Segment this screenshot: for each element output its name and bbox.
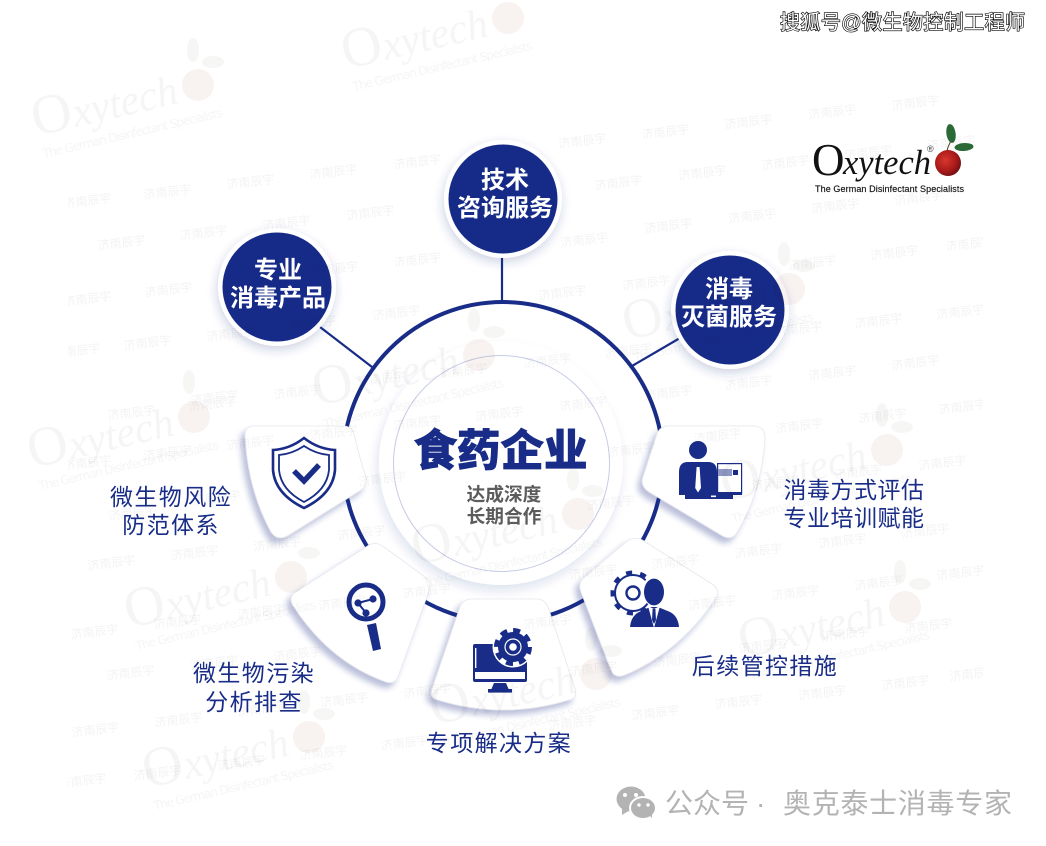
node: 消毒灭菌服务 circle: [671, 251, 789, 369]
watermark pattern: 济南辰宇: [761, 152, 810, 173]
node text: 技术咨询服务: [457, 167, 553, 222]
watermark pattern: 济南辰宇: [891, 92, 940, 113]
watermark pattern: 济南辰宇: [774, 318, 823, 339]
watermark pattern: 济南辰宇: [262, 212, 311, 233]
watermark pattern: 济南辰宇: [808, 362, 857, 383]
watermark logos: The German Disinfectant Specialists: [133, 598, 317, 653]
watermark logos: xytech: [756, 433, 871, 502]
node text: 专业消毒产品: [230, 257, 326, 312]
watermark pattern: 济南辰宇: [714, 691, 763, 712]
center subtitle: [467, 484, 542, 527]
watermark logos: O: [25, 79, 78, 149]
watermark pattern: 济南辰宇: [854, 310, 903, 331]
brand logo: Oxytech: The German Disinfectant Specialists: [815, 184, 964, 194]
icon: person at computer: [679, 441, 742, 499]
watermark logos: xytech: [63, 400, 178, 469]
watermark logos: xytech: [774, 590, 889, 659]
node text: 技术咨询服务: 技术: [481, 167, 529, 194]
footer account name: ·: [756, 788, 765, 819]
watermark pattern: 济南辰宇: [854, 572, 903, 593]
watermark pattern: 济南辰宇: [299, 742, 348, 763]
watermark pattern: 济南辰宇: [693, 425, 742, 446]
watermark pattern: 济南辰宇: [52, 340, 101, 361]
watermark pattern: 济南辰宇: [192, 487, 241, 508]
watermark logos: The German Disinfectant Specialists: [350, 39, 534, 94]
watermark pattern: 济南辰宇: [143, 442, 192, 463]
icon: monitor with gear: [473, 626, 534, 693]
watermark logos: The German Disinfectant Specialists: [321, 376, 505, 431]
watermark pattern: 济南辰宇: [569, 561, 618, 582]
watermark pattern: 济南辰宇: [372, 302, 421, 323]
watermark pattern: 济南辰宇: [558, 130, 607, 151]
node text: 专业消毒产品: 专业: [254, 257, 302, 284]
connector lines: [320, 255, 680, 367]
watermark pattern: 济南辰宇: [560, 229, 609, 250]
watermark pattern: 济南辰宇: [894, 187, 943, 208]
watermark pattern: 济南辰宇: [724, 372, 773, 393]
watermark pattern: 济南辰宇: [358, 468, 407, 489]
watermark pattern: 济南辰宇: [821, 623, 870, 644]
label: 微生物污染分析排查: [193, 660, 315, 715]
watermark pattern: 济南辰宇: [569, 658, 618, 679]
watermark pattern: 济南辰宇: [63, 288, 112, 309]
watermark pattern: 济南辰宇: [154, 709, 203, 730]
watermark logos: xytech: [348, 338, 463, 407]
watermark pattern: 济南辰宇: [936, 301, 985, 322]
watermark logos: O: [118, 571, 171, 641]
watermark pattern: 济南辰宇: [190, 387, 239, 408]
watermark pattern: 济南辰宇: [548, 712, 597, 733]
watermark pattern: 济南辰宇: [309, 161, 358, 182]
watermark pattern: 济南辰宇: [858, 405, 907, 426]
watermark pattern: 济南辰宇: [834, 461, 883, 482]
watermark pattern: 济南辰宇: [881, 672, 930, 693]
watermark pattern: 济南辰宇: [253, 533, 302, 554]
watermark pattern: 济南辰宇: [936, 562, 985, 583]
watermark pattern: 济南辰宇: [144, 279, 193, 300]
watermark pattern: 济南辰宇: [901, 520, 950, 541]
watermark logos: O: [405, 508, 458, 578]
label: 微生物污染分析排查: 分析排查: [205, 689, 303, 715]
watermark pattern: 济南辰宇: [844, 142, 893, 163]
watermark pattern: 济南辰宇: [891, 352, 940, 373]
watermark pattern: 济南辰宇: [237, 601, 286, 622]
center subtitle: 达成深度: [467, 484, 542, 505]
watermark pattern: 济南辰宇: [288, 312, 337, 333]
watermark pattern: 济南辰宇: [153, 611, 202, 632]
watermark pattern: 济南辰宇: [226, 171, 275, 192]
watermark logos: xytech: [67, 68, 182, 137]
watermark pattern: 济南辰宇: [734, 540, 783, 561]
label: 消毒方式评估专业培训赋能: 专业培训赋能: [784, 505, 924, 531]
watermark pattern: 济南辰宇: [402, 580, 451, 601]
watermark logos: O: [423, 668, 476, 738]
watermark pattern: 济南辰宇: [143, 181, 192, 202]
watermark pattern: 济南辰宇: [918, 452, 967, 473]
label: 后续管控措施: 后续管控措施: [692, 653, 838, 679]
watermark pattern: 济南辰宇: [927, 132, 976, 153]
watermark pattern: 济南辰宇: [273, 381, 322, 402]
watermark pattern: 济南辰宇: [170, 542, 219, 563]
footer account name: [665, 788, 1012, 819]
watermark logos: xytech: [658, 272, 773, 341]
watermark pattern: 济南辰宇: [678, 162, 727, 183]
node text: 消毒灭菌服务: 灭菌服务: [681, 304, 777, 331]
label: 消毒方式评估专业培训赋能: [784, 477, 924, 531]
watermark pattern: 济南辰宇: [949, 663, 998, 684]
watermark pattern: 济南辰宇: [798, 682, 847, 703]
watermark logos: The German Disinfectant Specialists: [631, 310, 815, 365]
icon: shield: [273, 438, 335, 508]
watermark pattern: 济南辰宇: [644, 215, 693, 236]
header source text: 搜狐号@微生物控制工程师: [780, 11, 1025, 34]
watermark logos: xytech: [160, 560, 275, 629]
watermark pattern: 济南辰宇: [217, 752, 266, 773]
watermark logos: The German Disinfectant Specialists: [420, 535, 604, 590]
watermark pattern: 济南辰宇: [607, 439, 656, 460]
watermark pattern: 济南辰宇: [393, 249, 442, 270]
watermark pattern: 济南辰宇: [945, 233, 994, 254]
watermark pattern: 济南辰宇: [738, 635, 787, 656]
watermark apples: [178, 2, 931, 753]
watermark pattern: 济南辰宇: [728, 205, 777, 226]
watermark pattern: 济南辰宇: [320, 689, 369, 710]
card: gear person: [580, 538, 718, 676]
node: 专业消毒产品 circle: [218, 228, 336, 346]
watermark pattern: 济南辰宇: [318, 592, 367, 613]
watermark pattern: 济南辰宇: [788, 252, 837, 273]
watermark pattern: 济南辰宇: [586, 492, 635, 513]
watermark pattern: 济南辰宇: [226, 432, 275, 453]
watermark pattern: 济南辰宇: [653, 649, 702, 670]
watermark pattern: 济南辰宇: [439, 360, 488, 381]
card: person at computer: [642, 426, 765, 538]
watermark pattern: 济南辰宇: [71, 719, 120, 740]
watermark pattern: 济南辰宇: [237, 698, 286, 719]
watermark logos: xytech: [465, 657, 580, 726]
brand logo: Oxytech: O: [812, 135, 844, 185]
watermark pattern: 济南辰宇: [190, 652, 239, 673]
watermark pattern: 济南辰宇: [393, 412, 442, 433]
watermark pattern: 济南辰宇: [775, 415, 824, 436]
node: 技术咨询服务 circle: [444, 140, 562, 258]
watermark pattern: 济南辰宇: [808, 101, 857, 122]
watermark logos: xytech: [377, 1, 492, 70]
watermark logos: O: [136, 731, 189, 801]
watermark pattern: 济南辰宇: [63, 190, 112, 211]
watermark logos: O: [306, 349, 359, 419]
watermark pattern: 济南辰宇: [724, 111, 773, 132]
watermark pattern: 济南辰宇: [87, 552, 136, 573]
watermark pattern: 济南辰宇: [357, 368, 406, 389]
watermark pattern: 济南辰宇: [393, 151, 442, 172]
icon: magnifier: [349, 585, 383, 651]
node text: 消毒灭菌服务: 消毒: [705, 276, 753, 303]
node text: 消毒灭菌服务: [681, 276, 777, 331]
watermark logos: The German Disinfectant Specialists: [40, 106, 224, 161]
node text: 技术咨询服务: 咨询服务: [457, 195, 553, 222]
watermark pattern: 济南辰宇: [523, 350, 572, 371]
watermark pattern: 济南辰宇: [206, 323, 255, 344]
label: 微生物风险防范体系: 防范体系: [122, 512, 220, 538]
watermark pattern: 济南辰宇: [559, 393, 608, 414]
brand logo: Oxytech: ®: [927, 144, 934, 154]
watermark pattern: 济南辰宇: [523, 611, 572, 632]
watermark pattern: 济南辰宇: [631, 702, 680, 723]
watermark pattern: 济南辰宇: [818, 530, 867, 551]
watermark logos: The German Disinfectant Specialists: [729, 471, 913, 526]
watermark pattern: 济南辰宇: [310, 258, 359, 279]
watermark logos: O: [21, 411, 74, 481]
watermark pattern: 济南辰宇: [938, 396, 987, 417]
watermark pattern: 济南辰宇: [538, 282, 587, 303]
center title: 食药企业: [414, 427, 588, 476]
card: shield: [245, 426, 366, 538]
watermark pattern: 济南辰宇: [811, 195, 860, 216]
card: magnifier: [291, 544, 430, 683]
watermark pattern: 济南辰宇: [70, 621, 119, 642]
label: 微生物风险防范体系: 微生物风险: [110, 484, 232, 510]
watermark logos: xytech: [447, 497, 562, 566]
watermark pattern: [52, 92, 998, 791]
watermark pattern: 济南辰宇: [188, 393, 237, 414]
icon: gear and businessman: [610, 570, 679, 628]
watermark logos: The German Disinfectant Specialists: [36, 438, 220, 493]
watermark pattern: 济南辰宇: [346, 202, 395, 223]
watermark pattern: 济南辰宇: [688, 592, 737, 613]
watermark pattern: 济南辰宇: [309, 422, 358, 443]
main ring: [343, 302, 663, 622]
watermark pattern: 济南辰宇: [108, 502, 157, 523]
watermark pattern: 济南辰宇: [106, 662, 155, 683]
watermark pattern: 济南辰宇: [641, 121, 690, 142]
watermark pattern: 济南辰宇: [133, 762, 182, 783]
label: 专项解决方案: 专项解决方案: [426, 730, 572, 756]
label: 消毒方式评估专业培训赋能: 消毒方式评估: [784, 477, 924, 503]
footer account name: 公众号: [665, 788, 749, 819]
watermark logos: O: [732, 601, 785, 671]
watermark logos: xytech: [178, 720, 293, 789]
watermark logos: O: [616, 283, 669, 353]
watermark pattern: 济南辰宇: [403, 680, 452, 701]
watermark pattern: 济南辰宇: [97, 232, 146, 253]
center thin ring: [394, 356, 610, 572]
watermark pattern: 济南辰宇: [380, 732, 429, 753]
watermark pattern: 济南辰宇: [651, 551, 700, 572]
label: 微生物风险防范体系: [110, 484, 232, 538]
watermark pattern: 济南辰宇: [63, 452, 112, 473]
label: 微生物污染分析排查: 微生物污染: [193, 660, 315, 686]
footer account name: 奥克泰士消毒专家: [783, 788, 1012, 819]
node text: 专业消毒产品: 消毒产品: [230, 285, 326, 312]
watermark pattern: 济南辰宇: [751, 472, 800, 493]
center soft disc: [379, 341, 623, 585]
watermark pattern: 济南辰宇: [644, 382, 693, 403]
watermark pattern: 济南辰宇: [107, 402, 156, 423]
brand logo: Oxytech: [812, 123, 974, 194]
watermark pattern: 济南辰宇: [622, 272, 671, 293]
watermark pattern: 济南辰宇: [870, 242, 919, 263]
watermark pattern: 济南辰宇: [273, 643, 322, 664]
watermark pattern: 济南辰宇: [904, 615, 953, 636]
watermark pattern: 济南辰宇: [475, 403, 524, 424]
center subtitle: 长期合作: [467, 506, 542, 527]
watermark pattern: 济南辰宇: [771, 582, 820, 603]
watermark pattern: 济南辰宇: [594, 172, 643, 193]
watermark logos: The German Disinfectant Specialists: [151, 758, 335, 813]
watermark pattern: 济南辰宇: [179, 222, 228, 243]
watermark pattern: 济南辰宇: [337, 522, 386, 543]
watermark logos: O: [714, 444, 767, 514]
watermark pattern: 济南辰宇: [604, 340, 653, 361]
watermark pattern: 济南辰宇: [58, 770, 107, 791]
card: monitor: [431, 599, 576, 710]
icon: wechat: [616, 786, 657, 820]
watermark logos: The German Disinfectant Specialists: [747, 628, 931, 683]
brand logo: Oxytech: xytech: [842, 143, 931, 182]
watermark logos: O: [335, 12, 388, 82]
watermark pattern: 济南辰宇: [123, 332, 172, 353]
watermark logos: The German Disinfectant Specialists: [438, 695, 622, 750]
